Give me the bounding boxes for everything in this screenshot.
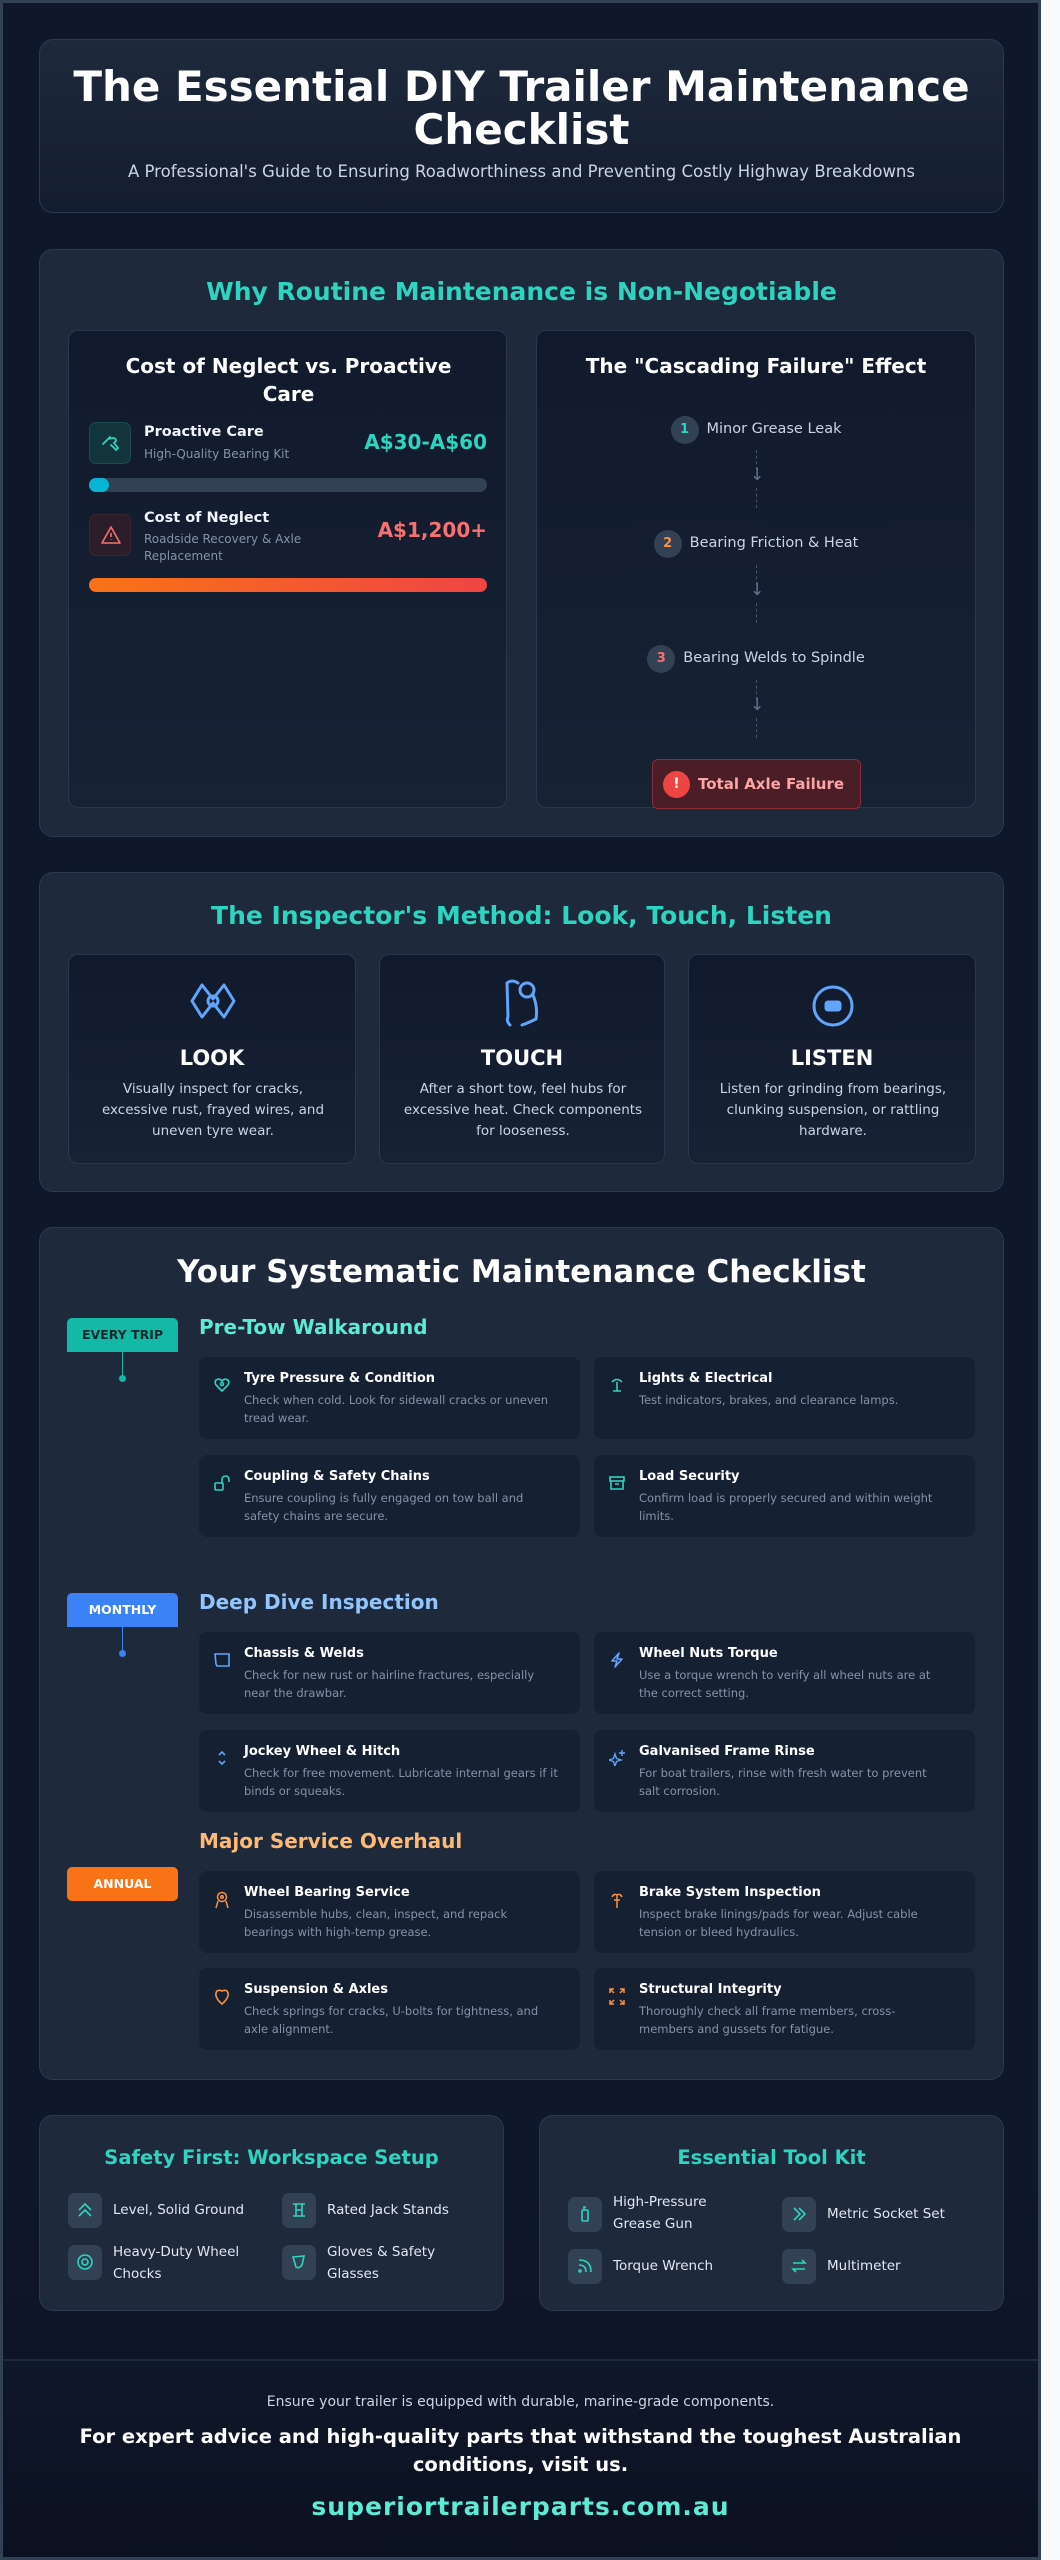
- arrow: ↓: [750, 695, 764, 715]
- item: wheel nuts: Wheel Nuts Torque: [639, 1646, 778, 1661]
- step 2: 2: [663, 536, 672, 551]
- item: torque wrench: [568, 2249, 713, 2284]
- text: After a short tow, feel hubs for excessive heat. Check components for looseness.: [404, 1081, 642, 1139]
- icon: eye: [190, 983, 236, 1019]
- footer note: Ensure your trailer is equipped with durable, marine-grade components.: [267, 2394, 774, 2410]
- step 1: Minor Grease Leak: [707, 421, 841, 437]
- heading: Why Routine Maintenance is Non-Negotiable: [206, 277, 837, 306]
- subtitle: A Professional's Guide to Ensuring Roadworthiness and Preventing Costly Highway Breakdowns: [128, 162, 915, 181]
- item: jack stands: Rated Jack Stands: [327, 2202, 449, 2218]
- item: galvanised: [594, 1730, 975, 1812]
- item: grease gun: [568, 2194, 707, 2232]
- badge: annual: [67, 1867, 178, 1901]
- item: jack stands: [282, 2193, 449, 2228]
- step 2: Bearing Friction & Heat: [690, 535, 858, 551]
- item: socket set: Metric Socket Set: [827, 2206, 945, 2222]
- text: Listen for grinding from bearings, clunking suspension, or rattling hardware.: [720, 1081, 946, 1139]
- item: tyre: [199, 1357, 580, 1439]
- item: jockey: Check for free movement. Lubricate internal gears if it binds or squeaks.: [244, 1766, 558, 1798]
- arrow: ↓: [750, 465, 764, 485]
- panel: cascading failure: [536, 330, 976, 808]
- panel: inspector's method: [39, 872, 1004, 1192]
- item: coupling: [199, 1455, 580, 1537]
- badge: every trip: EVERY TRIP: [82, 1327, 163, 1342]
- item: wheel nuts: Use a torque wrench to verify all wheel nuts are at the correct setting.: [639, 1668, 930, 1700]
- step 1: 1: [680, 422, 689, 437]
- item: gloves: Gloves & Safety Glasses: [327, 2244, 435, 2282]
- item: suspension: Check springs for cracks, U-bolts for tightness, and axle alignment.: [244, 2004, 538, 2036]
- bar: [89, 478, 487, 492]
- subheading: major service: Major Service Overhaul: [199, 1829, 462, 1853]
- price: A$1,200+: [378, 518, 487, 542]
- item: jockey: Jockey Wheel & Hitch: [244, 1744, 400, 1759]
- item: tyre: Tyre Pressure & Condition: [244, 1371, 435, 1386]
- neglect row: [89, 510, 487, 592]
- item: wheel bearing: Disassemble hubs, clean, inspect, and repack bearings with high-temp grease.: [244, 1907, 507, 1939]
- item: coupling: Ensure coupling is fully engaged on tow ball and safety chains are secure.: [244, 1491, 523, 1523]
- item: lights: Lights & Electrical: [639, 1371, 773, 1386]
- item: lights: Test indicators, brakes, and clearance lamps.: [639, 1393, 898, 1407]
- step 2: [654, 530, 858, 558]
- footer url: superiortrailerparts.com.au: [311, 2492, 730, 2521]
- text: Visually inspect for cracks, excessive rust, frayed wires, and uneven tyre wear.: [102, 1081, 324, 1139]
- panel: why routine maintenance: [39, 249, 1004, 837]
- badge: every trip: [67, 1318, 178, 1352]
- item: suspension: Suspension & Axles: [244, 1982, 388, 1997]
- footer call to action: For expert advice and high-quality parts that withstand the toughest Australian conditions, visit us.: [80, 2425, 961, 2476]
- item: socket set: [782, 2197, 945, 2232]
- panel: systematic checklist: [39, 1227, 1004, 2080]
- item: tyre: Check when cold. Look for sidewall cracks or uneven tread wear.: [244, 1393, 548, 1425]
- badge: monthly: [67, 1593, 178, 1627]
- card: look: [68, 954, 356, 1164]
- neglect row: Roadside Recovery & Axle Replacement: [144, 532, 301, 563]
- item: chassis: Chassis & Welds: [244, 1646, 364, 1661]
- item: multimeter: Multimeter: [827, 2258, 901, 2274]
- item: wheel bearing: [199, 1871, 580, 1953]
- item: multimeter: [782, 2249, 901, 2284]
- badge: annual: ANNUAL: [93, 1876, 152, 1891]
- item: lights: [594, 1357, 975, 1439]
- step 1: [671, 416, 842, 444]
- proactive row: [89, 422, 487, 492]
- item: load: Load Security: [639, 1469, 740, 1484]
- item: load: [594, 1455, 975, 1537]
- item: suspension: [199, 1968, 580, 2050]
- item: grease gun: High-Pressure Grease Gun: [613, 2194, 707, 2232]
- title: Checklist: [414, 105, 629, 154]
- heading: Safety First: Workspace Setup: [104, 2146, 439, 2169]
- card: listen: [688, 954, 976, 1164]
- heading: The Inspector's Method: Look, Touch, Listen: [211, 901, 832, 930]
- badge: monthly: MONTHLY: [89, 1602, 156, 1617]
- item: coupling: Coupling & Safety Chains: [244, 1469, 430, 1484]
- subheading: deep dive: Deep Dive Inspection: [199, 1590, 439, 1614]
- item: level ground: Level, Solid Ground: [113, 2202, 244, 2218]
- item: wheel chocks: Heavy-Duty Wheel Chocks: [113, 2244, 239, 2282]
- step 3: 3: [657, 651, 666, 666]
- step 3: [647, 645, 865, 673]
- item: brake: Inspect brake linings/pads for wear. Adjust cable tension or bleed hydraulics.: [639, 1907, 918, 1939]
- bar: [89, 578, 487, 592]
- callout: total axle failure: Total Axle Failure: [698, 775, 844, 793]
- label: LISTEN: [791, 1046, 873, 1070]
- item: galvanised: Galvanised Frame Rinse: [639, 1744, 815, 1759]
- arrow: ↓: [750, 580, 764, 600]
- price: A$30-A$60: [364, 430, 487, 454]
- heading: checklist: Your Systematic Maintenance Checklist: [177, 1254, 866, 1290]
- icon: warning: [89, 514, 131, 556]
- item: structural: Structural Integrity: [639, 1982, 782, 1997]
- heading: Essential Tool Kit: [677, 2146, 866, 2169]
- item: chassis: Check for new rust or hairline fractures, especially near the drawbar.: [244, 1668, 534, 1700]
- item: brake: [594, 1871, 975, 1953]
- panel: cost comparison: [68, 330, 507, 808]
- subheading: pre-tow: Pre-Tow Walkaround: [199, 1315, 428, 1339]
- callout: total axle failure: [652, 759, 861, 809]
- item: jockey: [199, 1730, 580, 1812]
- title: The Essential DIY Trailer Maintenance: [73, 62, 970, 111]
- item: torque wrench: Torque Wrench: [613, 2258, 713, 2274]
- panel: tool kit: [539, 2115, 1004, 2311]
- item: structural: [594, 1968, 975, 2050]
- item: brake: Brake System Inspection: [639, 1885, 821, 1900]
- timeline marker: [119, 1627, 126, 1657]
- footer: [3, 2359, 1038, 2557]
- card: touch: [379, 954, 665, 1164]
- item: wheel nuts: [594, 1632, 975, 1714]
- card title: Cost of Neglect vs. Proactive Care: [126, 354, 451, 406]
- item: galvanised: For boat trailers, rinse with fresh water to prevent salt corrosion.: [639, 1766, 927, 1798]
- card title: The "Cascading Failure" Effect: [586, 354, 926, 378]
- item: level ground: [68, 2193, 244, 2228]
- label: LOOK: [180, 1046, 244, 1070]
- icon: wrench: [89, 422, 131, 464]
- title: [73, 62, 970, 154]
- item: structural: Thoroughly check all frame members, cross-members and gussets for fatigue.: [639, 2004, 895, 2036]
- item: load: Confirm load is properly secured and within weight limits.: [639, 1491, 932, 1523]
- item: wheel bearing: Wheel Bearing Service: [244, 1885, 410, 1900]
- item: chassis: [199, 1632, 580, 1714]
- icon: hand: [506, 980, 538, 1027]
- proactive row: Proactive Care: [144, 424, 264, 440]
- step 3: Bearing Welds to Spindle: [683, 650, 865, 666]
- label: TOUCH: [481, 1046, 563, 1070]
- callout: total axle failure: !: [673, 776, 680, 792]
- timeline marker: [119, 1352, 126, 1382]
- icon: ear: [812, 986, 854, 1026]
- neglect row: Cost of Neglect: [144, 510, 269, 526]
- proactive row: High-Quality Bearing Kit: [144, 447, 289, 461]
- header card: [39, 39, 1004, 213]
- panel: safety first: [39, 2115, 504, 2311]
